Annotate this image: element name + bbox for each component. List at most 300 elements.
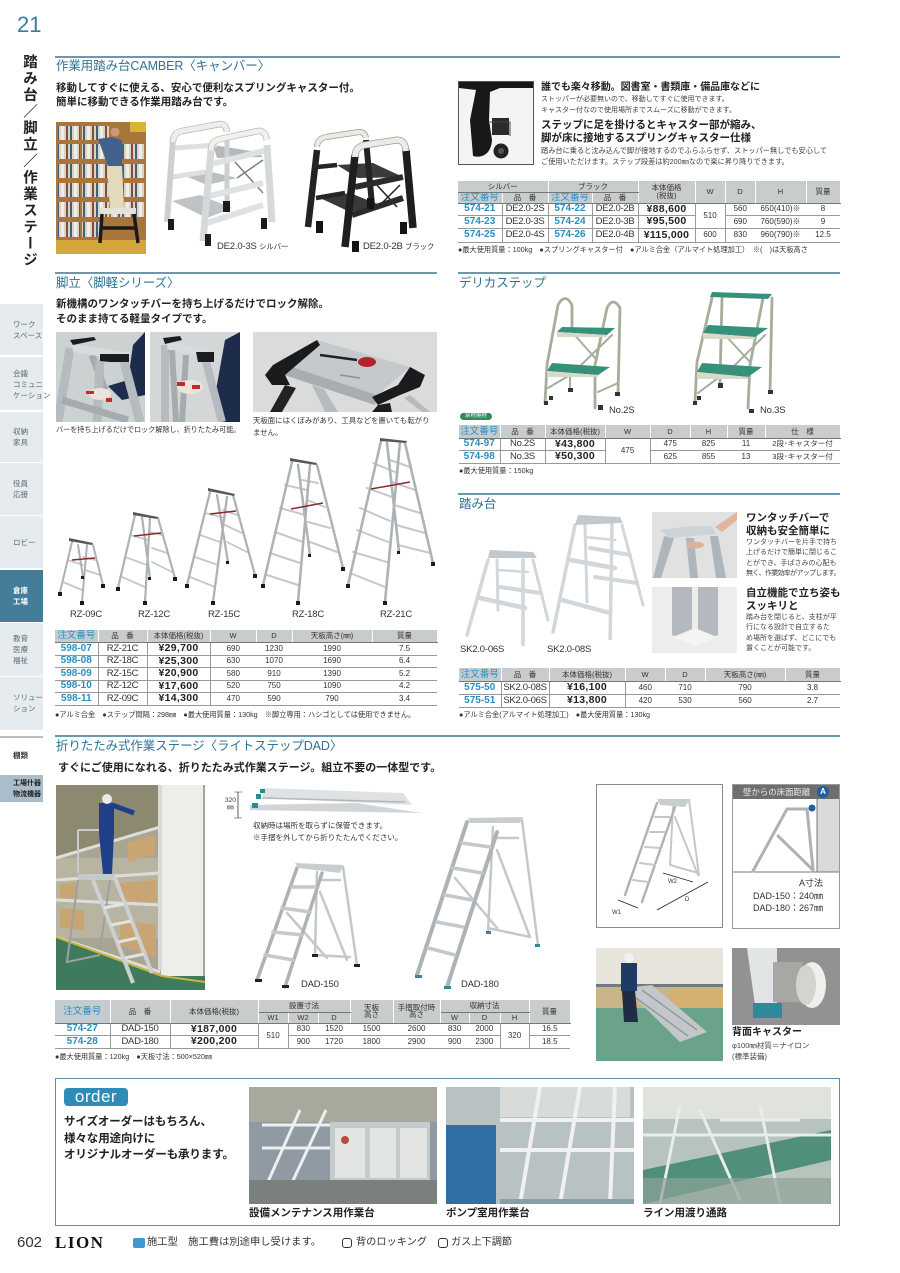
tab: executive bbox=[0, 463, 43, 515]
text: one-touch bar: 無く、作業効率がアップします。 bbox=[746, 570, 840, 577]
lead text: 新機構のワンタッチバーを持ち上げるだけでロック解除。 bbox=[56, 298, 329, 310]
text: self-standing: め場所を選ばず、どこにでも bbox=[746, 635, 836, 642]
table: CAMBER specs: 本体価格 bbox=[652, 183, 682, 192]
text: A dimension: DAD-180：267㎜ bbox=[753, 903, 823, 913]
panel: Delica step bbox=[458, 272, 841, 475]
text: spring caster: ご使用いただけます。ステップ段差は約200㎜なので楽に昇り降りできます。 bbox=[541, 157, 789, 166]
tab: executive: 応接 bbox=[13, 490, 28, 499]
tab: storage: 収納 bbox=[13, 427, 28, 436]
table: CAMBER specs: 注文番号 bbox=[551, 192, 589, 203]
table: DAD specs: 1720 bbox=[325, 1036, 343, 1046]
ladder: RZ-18C bbox=[261, 458, 345, 605]
label: DE2.0-2B: DE2.0-2B ブラック bbox=[363, 241, 434, 252]
table: CAMBER specs: (税抜) bbox=[656, 191, 676, 200]
table: DAD specs: DAD-180 bbox=[122, 1036, 158, 1047]
badge: material bbox=[460, 413, 492, 420]
footer bbox=[0, 1232, 540, 1254]
table: SK specs: SK2.0-06S bbox=[503, 695, 547, 706]
table: RZ specs: 1090 bbox=[323, 681, 341, 690]
table: CAMBER specs: 8 bbox=[821, 204, 825, 213]
text: order description bbox=[64, 1114, 234, 1164]
sidebar: chapter navigation bbox=[0, 12, 50, 802]
tab: warehouse active: 工場 bbox=[13, 597, 28, 606]
table: RZ specs: 質量 bbox=[397, 631, 412, 640]
chapter number 21: 21 bbox=[17, 12, 41, 37]
table: SK specs: 575-51 bbox=[464, 694, 495, 706]
table: Delica specs: 574-97 bbox=[464, 438, 495, 449]
table: CAMBER specs: 690 bbox=[734, 216, 747, 226]
text: one-touch bar: 上げるだけで簡単に閉じるこ bbox=[746, 549, 837, 556]
table: DAD specs: 18.5 bbox=[542, 1036, 558, 1046]
label: SK2.0-06S: SK2.0-06S bbox=[460, 644, 504, 655]
table: DAD specs: 1800 bbox=[363, 1036, 380, 1046]
table: CAMBER specs: DE2.0-4S bbox=[506, 229, 544, 240]
table: RZ specs: 470 bbox=[227, 694, 240, 702]
photo: library bbox=[56, 122, 146, 254]
table: CAMBER specs: DE2.0-4B bbox=[596, 229, 634, 240]
heading: stepladder: 脚立〈脚軽シリーズ〉 bbox=[56, 276, 179, 290]
table: SK specs: SK2.0-08S bbox=[503, 682, 547, 693]
table: CAMBER specs: 574-25 bbox=[464, 229, 495, 240]
table: Delica specs: 3段･キャスター付 bbox=[772, 452, 833, 461]
table: RZ specs: 4.2 bbox=[399, 681, 410, 690]
text: self-standing bbox=[746, 587, 840, 652]
table: DAD specs: 830 bbox=[448, 1024, 461, 1033]
caption: line crossing: ライン用渡り通路 bbox=[643, 1207, 727, 1219]
text: one-touch bar: ワンタッチバーで bbox=[746, 512, 829, 524]
table: DAD specs: D bbox=[331, 1013, 337, 1022]
icon: construction type bbox=[133, 1238, 145, 1248]
text: self-standing: 置くことが可能です。 bbox=[746, 645, 815, 652]
table: SK specs: 注文番号 bbox=[461, 668, 499, 680]
table: Delica specs: 625 bbox=[664, 452, 677, 460]
table: SK specs: 575-50 bbox=[464, 682, 495, 692]
table: RZ specs: W bbox=[229, 631, 237, 640]
photo: lock bar 1 bbox=[56, 332, 145, 422]
table: Delica specs: 注文番号 bbox=[460, 426, 498, 436]
photo: maintenance platform bbox=[249, 1087, 437, 1204]
table: SK specs: 天板高さ(㎜) bbox=[724, 670, 766, 678]
table: DAD specs: 2000 bbox=[475, 1024, 493, 1033]
text: rear caster: φ100㎜材質＝ナイロン bbox=[732, 1041, 809, 1050]
label: DE2.0-3S: DE2.0-3S シルバー bbox=[217, 241, 288, 252]
table: RZ specs: ¥20,900 bbox=[158, 667, 199, 679]
tab: workspace: ワーク bbox=[13, 320, 36, 329]
text: easy moving: キャスター付なので使用場所までスムーズに移動ができます。 bbox=[541, 107, 736, 114]
tab: storage: 家具 bbox=[13, 438, 28, 447]
table: RZ specs: RZ-21C bbox=[107, 643, 138, 654]
table: RZ specs: 790 bbox=[325, 694, 339, 702]
table: SK specs: 3.8 bbox=[807, 682, 818, 692]
table: SK specs: ¥13,800 bbox=[567, 694, 607, 706]
table: Delica specs: 855 bbox=[702, 452, 715, 460]
table: RZ specs: 598-10 bbox=[61, 680, 92, 691]
heading: step stool: 踏み台 bbox=[459, 497, 496, 511]
table: DAD specs: 本体価格(税抜) bbox=[189, 1006, 239, 1016]
table: DAD specs: D bbox=[482, 1013, 487, 1022]
diagram: W1 W2 D dimensions bbox=[596, 784, 723, 928]
tab: solution bbox=[0, 677, 43, 730]
table: RZ specs: 598-08 bbox=[61, 655, 92, 666]
ladder: RZ-15C bbox=[185, 488, 257, 605]
text: easy moving bbox=[541, 81, 760, 114]
caption: folded stage bbox=[253, 821, 402, 842]
product: SK2.0-08S bbox=[551, 515, 644, 640]
table: Delica specs: 475 bbox=[664, 439, 677, 448]
table: Delica specs: No.3S bbox=[510, 451, 535, 462]
table: RZ specs: RZ-18C bbox=[107, 655, 138, 666]
table: DAD specs: 900 bbox=[448, 1036, 461, 1046]
table: SK specs: 品 番 bbox=[514, 670, 536, 678]
table: DAD specs: 手摺取付時 bbox=[398, 1003, 435, 1012]
table: DAD specs: 質量 bbox=[542, 1006, 557, 1016]
legend: gas lift: ガス上下調節 bbox=[451, 1237, 512, 1248]
icon: gas lift bbox=[438, 1238, 448, 1248]
label: RZ-18C: RZ-18C bbox=[292, 609, 324, 620]
tab: shelves bbox=[0, 736, 43, 772]
tab: workspace bbox=[0, 304, 43, 355]
product: silver stool bbox=[164, 120, 276, 246]
label: No.3S: No.3S bbox=[760, 405, 785, 416]
product: DAD-150 bbox=[255, 863, 360, 989]
table: CAMBER specs: ブラック bbox=[578, 182, 608, 190]
product: SK2.0-06S bbox=[465, 550, 550, 646]
table: DAD specs: 1500 bbox=[363, 1024, 380, 1033]
table: DAD specs: W bbox=[451, 1013, 458, 1022]
lead text bbox=[56, 298, 329, 325]
table: RZ specs: 3.4 bbox=[399, 694, 410, 702]
table: Delica specs: 2段･キャスター付 bbox=[772, 439, 833, 448]
header: wall distance: 壁からの床面距離 bbox=[743, 787, 810, 797]
text: self-standing: 踏み台を閉じると、支柱が平 bbox=[746, 614, 837, 621]
tab: education: 医療 bbox=[13, 645, 28, 654]
text: one-touch bar: とができ、手ばさみの心配も bbox=[746, 560, 837, 567]
tab: education: 福祉 bbox=[13, 656, 28, 665]
diagram: W1 W2 D dimensions: W2 bbox=[668, 879, 678, 885]
table: CAMBER specs: W bbox=[706, 187, 714, 196]
table: CAMBER specs: 574-23 bbox=[464, 216, 495, 226]
photo: moving with caster bbox=[596, 948, 723, 1061]
product: black stool bbox=[304, 129, 417, 252]
text: A dimension: A寸法 bbox=[799, 878, 823, 888]
label: SK2.0-08S: SK2.0-08S bbox=[547, 644, 591, 655]
diagram: wall distance A bbox=[732, 784, 840, 929]
tab: factory fixtures: 物流機器 bbox=[13, 791, 41, 798]
label: DAD-150: DAD-150 bbox=[301, 979, 339, 990]
table: CAMBER specs: H bbox=[778, 187, 783, 196]
label: No.2S: No.2S bbox=[609, 405, 634, 416]
table: Delica specs: 質量 bbox=[738, 426, 754, 436]
text: rear caster: 背面キャスター bbox=[732, 1027, 802, 1038]
panel: folding work stage DAD bbox=[55, 735, 840, 1061]
lead text: 簡単に移動できる作業用踏み台です。 bbox=[56, 96, 233, 108]
table: RZ specs: 598-07 bbox=[61, 642, 92, 654]
tab: warehouse active bbox=[0, 570, 43, 622]
table: CAMBER specs: 品 番 bbox=[514, 193, 536, 202]
photo: line crossing path bbox=[643, 1087, 831, 1204]
table: RZ specs: 630 bbox=[227, 656, 240, 665]
table: SK specs: 420 bbox=[639, 696, 652, 704]
table: DAD specs: 830 bbox=[297, 1024, 310, 1033]
photo: caster close-up bbox=[458, 81, 534, 165]
table: DAD specs: 天板 bbox=[364, 1003, 379, 1012]
note: DAD: ●最大使用質量：120kg ●天板寸法：500×520㎜ bbox=[55, 1052, 212, 1061]
table: CAMBER specs: シルバー bbox=[488, 182, 518, 190]
text: spring caster bbox=[541, 118, 827, 166]
table: RZ specs: 580 bbox=[227, 668, 240, 678]
tab: shelves: 棚類 bbox=[13, 751, 28, 760]
table: Delica specs: 825 bbox=[702, 439, 715, 448]
table: RZ specs: 1230 bbox=[265, 644, 283, 652]
table: DAD specs: 高さ bbox=[409, 1010, 424, 1019]
table: CAMBER specs: 830 bbox=[734, 230, 747, 239]
panel: CAMBER step stool bbox=[55, 56, 841, 254]
text: self-standing: スッキリと bbox=[746, 600, 798, 612]
legend: construction type: 施工型 施工費は別途申し受けます。 bbox=[147, 1237, 321, 1248]
photo: self-standing bbox=[652, 587, 737, 653]
table: DAD specs: W2 bbox=[297, 1013, 309, 1022]
table: RZ specs: 520 bbox=[227, 681, 240, 690]
table: RZ specs: 598-11 bbox=[61, 692, 92, 704]
photo: rear caster bbox=[732, 948, 840, 1025]
table: Delica specs: D bbox=[667, 426, 673, 436]
ladder: RZ-21C bbox=[346, 438, 435, 605]
photo: one-touch bar bbox=[652, 512, 737, 578]
table: RZ specs: ¥14,300 bbox=[158, 692, 199, 704]
table: DAD specs: 16.5 bbox=[542, 1024, 558, 1033]
table: CAMBER specs: 質量 bbox=[816, 187, 830, 196]
badge: order: order bbox=[75, 1087, 117, 1106]
caption: folded stage: 収納時は場所を取らずに保管できます。 bbox=[253, 821, 387, 830]
table: RZ specs: 690 bbox=[227, 644, 240, 652]
table: CAMBER specs: DE2.0-2S bbox=[506, 203, 544, 214]
label: RZ-12C: RZ-12C bbox=[138, 609, 170, 620]
text: A dimension bbox=[753, 878, 823, 913]
caption: maintenance: 設備メンテナンス用作業台 bbox=[249, 1207, 375, 1219]
table: DAD specs bbox=[55, 1000, 571, 1048]
badge: order bbox=[64, 1088, 128, 1106]
table: CAMBER specs: DE2.0-2B bbox=[596, 203, 634, 214]
text: order description: サイズオーダーはもちろん、 bbox=[64, 1116, 212, 1128]
table: RZ specs: 1390 bbox=[323, 668, 341, 678]
text: self-standing: 自立機能で立ち姿も bbox=[746, 587, 840, 599]
product: Delica No.3S bbox=[693, 292, 774, 413]
panel: lightweight stepladders bbox=[55, 272, 438, 719]
table: CAMBER specs: 960(790)※ bbox=[760, 230, 801, 239]
table: SK specs bbox=[459, 668, 840, 708]
header: wall distance bbox=[733, 785, 839, 799]
table: RZ specs: 7.5 bbox=[399, 644, 410, 652]
dimension: 320mm: 320 bbox=[225, 797, 236, 804]
text: rear caster: (標準装備) bbox=[732, 1052, 767, 1061]
label: RZ-21C: RZ-21C bbox=[380, 609, 412, 620]
text: A dimension: DAD-150：240㎜ bbox=[753, 890, 823, 900]
table: CAMBER specs: 760(590)※ bbox=[760, 216, 801, 226]
table: SK specs: D bbox=[682, 670, 688, 678]
table: Delica specs: 仕 様 bbox=[791, 426, 814, 436]
text: spring caster: 踏み台に乗ると沈み込んで脚が接地するのでふらふらせず、ストッパー無しでも安心して bbox=[541, 146, 827, 155]
table: DAD specs: 品 番 bbox=[129, 1006, 151, 1016]
dimension: 320mm bbox=[225, 797, 236, 811]
photo: lock bar 2 bbox=[150, 332, 240, 422]
tab: factory fixtures bbox=[0, 775, 43, 802]
table: DAD specs: 574-28 bbox=[67, 1036, 98, 1046]
table: RZ specs: 6.4 bbox=[399, 656, 410, 665]
table: RZ specs: 598-09 bbox=[61, 668, 92, 678]
table: Delica specs: 11 bbox=[742, 439, 750, 448]
text: order description: オリジナルオーダーも承ります。 bbox=[64, 1149, 234, 1161]
table: RZ specs: 750 bbox=[267, 681, 281, 690]
table: RZ specs: 5.2 bbox=[399, 668, 410, 678]
text: one-touch bar bbox=[746, 512, 840, 577]
tab: executive: 役員 bbox=[13, 479, 28, 488]
table: DAD specs: ¥200,200 bbox=[191, 1035, 237, 1047]
table: SK specs: 本体価格(税抜) bbox=[562, 670, 612, 678]
table: DAD specs: DAD-150 bbox=[122, 1023, 158, 1034]
table: CAMBER specs: ¥95,500 bbox=[646, 215, 687, 227]
table: Delica specs: 574-98 bbox=[464, 450, 495, 462]
table: CAMBER specs: 12.5 bbox=[815, 230, 831, 239]
table: CAMBER specs: 650(410)※ bbox=[760, 204, 801, 213]
text: one-touch bar: ワンタッチバーを片手で持ち bbox=[746, 539, 837, 546]
table: RZ specs bbox=[55, 630, 438, 706]
product: RZ ladders lineup bbox=[58, 438, 435, 605]
tab: meeting: ケーション bbox=[13, 391, 50, 400]
table: RZ specs: 1990 bbox=[323, 644, 341, 652]
table: CAMBER specs: 9 bbox=[821, 216, 825, 226]
table: Delica specs: H bbox=[706, 426, 711, 436]
caption: folded stage: ※手摺を外してから折りたたんでください。 bbox=[253, 833, 402, 842]
table: SK specs: W bbox=[641, 670, 649, 678]
table: SK specs: 460 bbox=[639, 682, 652, 692]
page number: 602 bbox=[17, 1234, 42, 1251]
tab: solution: ション bbox=[13, 704, 36, 713]
table: RZ specs: 910 bbox=[267, 668, 281, 678]
text: easy moving: 誰でも楽々移動。図書室・書類庫・備品庫などに bbox=[541, 82, 760, 93]
lead text: そのまま持てる軽量タイプです。 bbox=[56, 313, 212, 325]
table: CAMBER specs: 品 番 bbox=[604, 193, 626, 202]
photo: tool tray bbox=[253, 332, 437, 412]
table: DAD specs: 注文番号 bbox=[63, 1006, 101, 1016]
table: DAD specs: 2300 bbox=[475, 1036, 493, 1046]
badge: A: A bbox=[820, 787, 826, 796]
table: Delica specs: 13 bbox=[742, 452, 750, 460]
table: Delica specs bbox=[459, 425, 840, 464]
panel: order bbox=[55, 1078, 840, 1226]
table: Delica specs: ¥43,800 bbox=[555, 438, 595, 450]
badge: material: 余材廃材 bbox=[465, 413, 487, 419]
text: rear caster bbox=[732, 1026, 809, 1061]
table: Delica specs: ¥50,300 bbox=[555, 450, 595, 462]
table: RZ specs: D bbox=[271, 631, 277, 640]
table: Delica specs: W bbox=[624, 426, 631, 436]
table: CAMBER specs: 574-26 bbox=[554, 229, 586, 240]
tab: storage bbox=[0, 412, 43, 462]
ladder: RZ-12C bbox=[116, 512, 177, 605]
table: RZ specs: 天板高さ(㎜) bbox=[311, 631, 353, 640]
tab: warehouse active: 倉庫 bbox=[13, 586, 28, 595]
table: SK specs: 530 bbox=[678, 696, 692, 704]
table: Delica specs: 品 番 bbox=[511, 426, 534, 436]
table: RZ specs: RZ-15C bbox=[107, 668, 138, 679]
dimension: 320mm: ㎜ bbox=[227, 804, 234, 811]
table: CAMBER specs: D bbox=[737, 187, 743, 196]
table: RZ specs: 1690 bbox=[323, 656, 341, 665]
text: order description: 様々な用途向けに bbox=[64, 1132, 155, 1144]
table: RZ specs: 590 bbox=[267, 694, 281, 702]
table: Delica specs: 475 bbox=[621, 446, 634, 454]
tab: factory fixtures: 工場什器 bbox=[13, 780, 41, 787]
table: DAD specs: 2900 bbox=[408, 1036, 425, 1046]
table: DAD specs: ¥187,000 bbox=[191, 1023, 237, 1035]
table: CAMBER specs: 574-24 bbox=[554, 216, 586, 226]
table: RZ specs: ¥29,700 bbox=[158, 642, 199, 654]
product: folded stage bbox=[234, 788, 422, 818]
text: easy moving: ストッパーが必要無いので、移動してすぐに使用できます。 bbox=[541, 96, 729, 103]
note: Delica: ●最大使用質量：150kg bbox=[459, 466, 533, 475]
table: DAD specs: 高さ bbox=[364, 1010, 379, 1019]
panel: step stool SK bbox=[458, 493, 841, 719]
caption: tool tray: ません。 bbox=[253, 428, 282, 437]
badge: A bbox=[817, 786, 829, 798]
table: DAD specs: 1520 bbox=[325, 1024, 343, 1033]
lead text: すぐにご使用になれる、折りたたみ式作業ステージ。組立不要の一体型です。 bbox=[58, 762, 441, 774]
tab: lobby: ロビー bbox=[13, 538, 36, 547]
table: SK specs: 790 bbox=[738, 682, 752, 692]
table: CAMBER specs: 574-21 bbox=[464, 203, 495, 214]
table: DAD specs: 320 bbox=[508, 1030, 521, 1040]
chapter vertical title: 踏み台／脚立／作業ステージ bbox=[21, 54, 37, 268]
heading: CAMBER: 作業用踏み台CAMBER〈キャンバー〉 bbox=[56, 59, 270, 73]
table: CAMBER specs: DE2.0-3B bbox=[596, 216, 634, 227]
text: spring caster: 脚が床に接地するスプリングキャスター仕様 bbox=[541, 132, 751, 144]
tab: meeting bbox=[0, 357, 43, 410]
table: CAMBER specs: 600 bbox=[703, 230, 717, 239]
legend: back locking: 背のロッキング bbox=[356, 1237, 427, 1248]
heading: DAD: 折りたたみ式作業ステージ〈ライトステップDAD〉 bbox=[56, 739, 342, 753]
tab: meeting: コミュニ bbox=[13, 380, 43, 389]
table: CAMBER specs: 注文番号 bbox=[461, 192, 499, 203]
table: Delica specs: No.2S bbox=[510, 438, 535, 449]
table: SK specs: 質量 bbox=[805, 670, 820, 678]
caption: pump room: ポンプ室用作業台 bbox=[446, 1207, 530, 1219]
caption: tool tray bbox=[253, 416, 430, 437]
table: DAD specs: H bbox=[512, 1013, 517, 1022]
table: Delica specs: 本体価格(税抜) bbox=[550, 426, 600, 436]
table: SK specs: 560 bbox=[738, 696, 752, 704]
logo: LION: LION bbox=[55, 1233, 104, 1252]
table: RZ specs: 1070 bbox=[265, 656, 283, 665]
table: RZ specs: ¥17,600 bbox=[158, 680, 199, 692]
table: CAMBER specs: DE2.0-3S bbox=[506, 216, 544, 227]
caption: lock bar: バーを持ち上げるだけでロック解除し、折りたたみ可能。 bbox=[56, 425, 240, 434]
tab: solution: ソリュー bbox=[13, 693, 43, 702]
table: DAD specs: 510 bbox=[266, 1030, 280, 1040]
caption: tool tray: 天板面にはくぼみがあり、工具などを置いても転がり bbox=[253, 416, 430, 425]
photo: warehouse use bbox=[56, 785, 205, 990]
heading: Delica step: デリカステップ bbox=[459, 276, 546, 290]
note: SK: ●アルミ合金(アルマイト処理加工) ●最大使用質量：130kg bbox=[459, 710, 650, 719]
table: CAMBER specs: ¥115,000 bbox=[644, 229, 689, 241]
tab: education: 教育 bbox=[13, 634, 28, 643]
note: RZ: ●アルミ合金 ●ステップ間隔：298㎜ ●最大使用質量：130kg ※脚立専用：ハシゴとしては使用できません。 bbox=[55, 710, 415, 719]
table: SK specs: 2.7 bbox=[807, 696, 818, 704]
table: RZ specs: 本体価格(税抜) bbox=[154, 631, 204, 640]
table: RZ specs: ¥25,300 bbox=[158, 655, 199, 667]
table: CAMBER specs: 510 bbox=[703, 210, 717, 220]
table: CAMBER specs: ¥88,600 bbox=[646, 203, 687, 215]
table: SK specs: 710 bbox=[678, 682, 692, 692]
